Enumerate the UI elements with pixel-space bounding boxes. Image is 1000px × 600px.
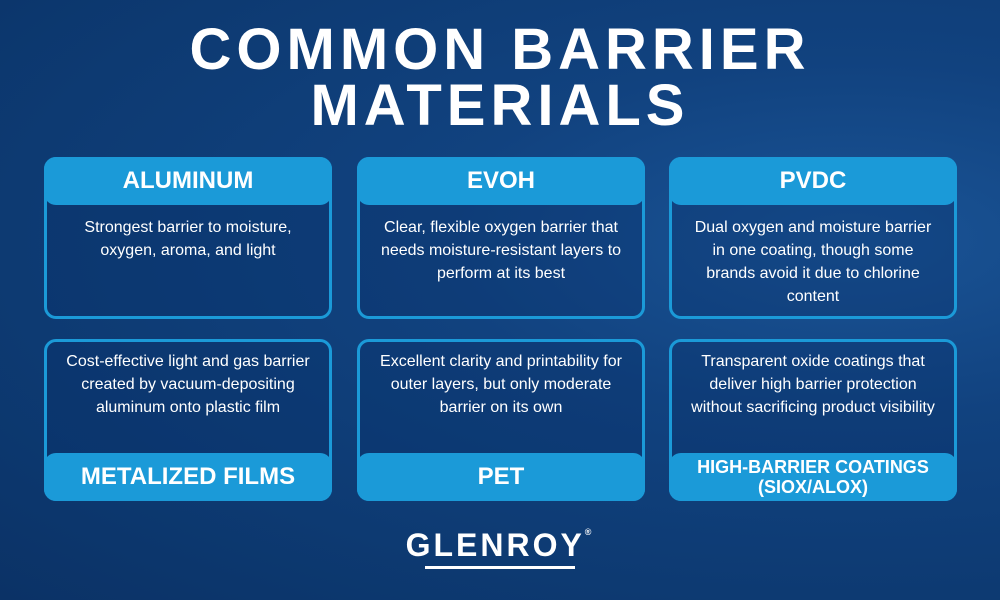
header: metalized: [44, 453, 332, 501]
header: aluminum: [44, 157, 332, 205]
panel: evoh: [357, 157, 645, 319]
panel: aluminum: [44, 157, 332, 319]
header: pvdc: [669, 157, 957, 205]
header: pet: [357, 453, 645, 501]
header: pvdc: PVDC: [780, 167, 846, 194]
text: metalized: Cost-effective light and gas barrier created by vacuum-depositing aluminum onto plastic film: [66, 353, 310, 416]
text: pvdc: Dual oxygen and moisture barrier in one coating, though some brands avoid it due to chlorine content: [695, 219, 931, 305]
title: COMMON BARRIER: [190, 17, 810, 82]
header: metalized: METALIZED FILMS: [81, 463, 295, 490]
header: coatings: HIGH-BARRIER COATINGS: [697, 457, 929, 477]
text: evoh: Clear, flexible oxygen barrier that needs moisture-resistant layers to perform at its best: [381, 219, 621, 282]
panel: pet: [357, 339, 645, 501]
panel: metalized films: [44, 339, 332, 501]
text: aluminum: Strongest barrier to moisture, oxygen, aroma, and light: [84, 219, 292, 259]
title: [190, 17, 810, 138]
text: coatings: Transparent oxide coatings that deliver high barrier protection without sacrificing product visibility: [691, 353, 935, 416]
panel: pvdc: [669, 157, 957, 319]
header: evoh: EVOH: [467, 167, 535, 194]
header: pet: PET: [478, 463, 524, 490]
header: evoh: [357, 157, 645, 205]
header: coatings: (SIOX/ALOX): [758, 477, 868, 497]
logo: GLENROY®: [406, 527, 594, 563]
title: MATERIALS: [310, 73, 690, 138]
header: aluminum: ALUMINUM: [123, 167, 253, 194]
text: pet: Excellent clarity and printability for outer layers, but only moderate barrier on its own: [380, 353, 622, 416]
header: coatings: [669, 453, 957, 501]
panel: high-barrier coatings: [669, 339, 957, 501]
